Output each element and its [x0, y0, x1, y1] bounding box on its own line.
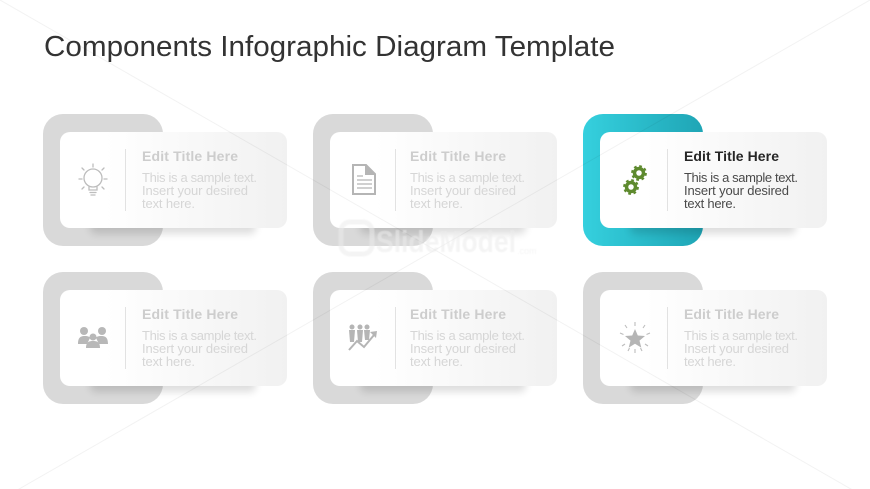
text block 1: This is a sample text.	[142, 170, 257, 185]
text block 3: Edit Title Here	[684, 148, 779, 164]
text block 6	[684, 306, 798, 369]
card 4	[60, 290, 287, 386]
text block 4: This is a sample text.	[142, 328, 257, 343]
panel: card 4 bottom-left	[43, 272, 287, 404]
text block 2: This is a sample text.	[410, 170, 525, 185]
text block 6: Insert your desired	[684, 341, 789, 356]
icon: gears	[624, 166, 646, 194]
divider 5	[394, 307, 396, 369]
panel: card 5 bottom-middle	[313, 272, 557, 404]
text block 5: Edit Title Here	[410, 306, 506, 322]
text block 3: Insert your desired	[684, 183, 789, 198]
watermark: SlideModel: .com	[517, 246, 537, 256]
card 2	[330, 132, 557, 228]
text block 5	[410, 306, 525, 369]
text block 4: text here.	[142, 354, 195, 369]
back square 4	[43, 272, 163, 404]
icon: document	[353, 165, 375, 194]
text block 2: text here.	[410, 196, 463, 211]
text block 2: Insert your desired	[410, 183, 516, 198]
card 3	[600, 132, 827, 228]
text block 4: Edit Title Here	[142, 306, 238, 322]
back square 6	[583, 272, 703, 404]
icon: light bulb	[79, 164, 107, 195]
back square 5	[313, 272, 433, 404]
text block 6: Edit Title Here	[684, 306, 779, 322]
text block 1: text here.	[142, 196, 195, 211]
text block 6: text here.	[684, 354, 736, 369]
text block 6: This is a sample text.	[684, 328, 798, 343]
icon: team	[78, 327, 108, 348]
panel: card 6 bottom-right	[583, 272, 827, 404]
panel: card 2 top-middle	[313, 114, 557, 246]
divider 6	[666, 307, 668, 369]
text block 2	[410, 148, 525, 211]
icon: star burst	[620, 322, 650, 353]
text block 2: Edit Title Here	[410, 148, 506, 164]
text block 5: text here.	[410, 354, 463, 369]
back square 2	[313, 114, 433, 246]
panel: card 3 top-right highlighted	[583, 114, 827, 246]
divider 3	[666, 149, 668, 211]
icon: people with growth arrow	[349, 324, 377, 350]
card 5	[330, 290, 557, 386]
title: Components Infographic Diagram Template	[44, 31, 615, 63]
back square 3	[583, 114, 703, 246]
text block 1: Edit Title Here	[142, 148, 238, 164]
card 6	[600, 290, 827, 386]
text block 5: Insert your desired	[410, 341, 516, 356]
text block 3: text here.	[684, 196, 736, 211]
text block 5: This is a sample text.	[410, 328, 525, 343]
divider 4	[124, 307, 126, 369]
divider 1	[124, 149, 126, 211]
text block 4	[142, 306, 257, 369]
watermark: SlideModel: SlideModel	[376, 224, 516, 259]
card 1	[60, 132, 287, 228]
back square 1	[43, 114, 163, 246]
text block 1	[142, 148, 257, 211]
text block 4: Insert your desired	[142, 341, 248, 356]
text block 3	[684, 148, 798, 211]
divider 2	[394, 149, 396, 211]
text block 1: Insert your desired	[142, 183, 248, 198]
panel: card 1 top-left	[43, 114, 287, 246]
text block 3: This is a sample text.	[684, 170, 798, 185]
